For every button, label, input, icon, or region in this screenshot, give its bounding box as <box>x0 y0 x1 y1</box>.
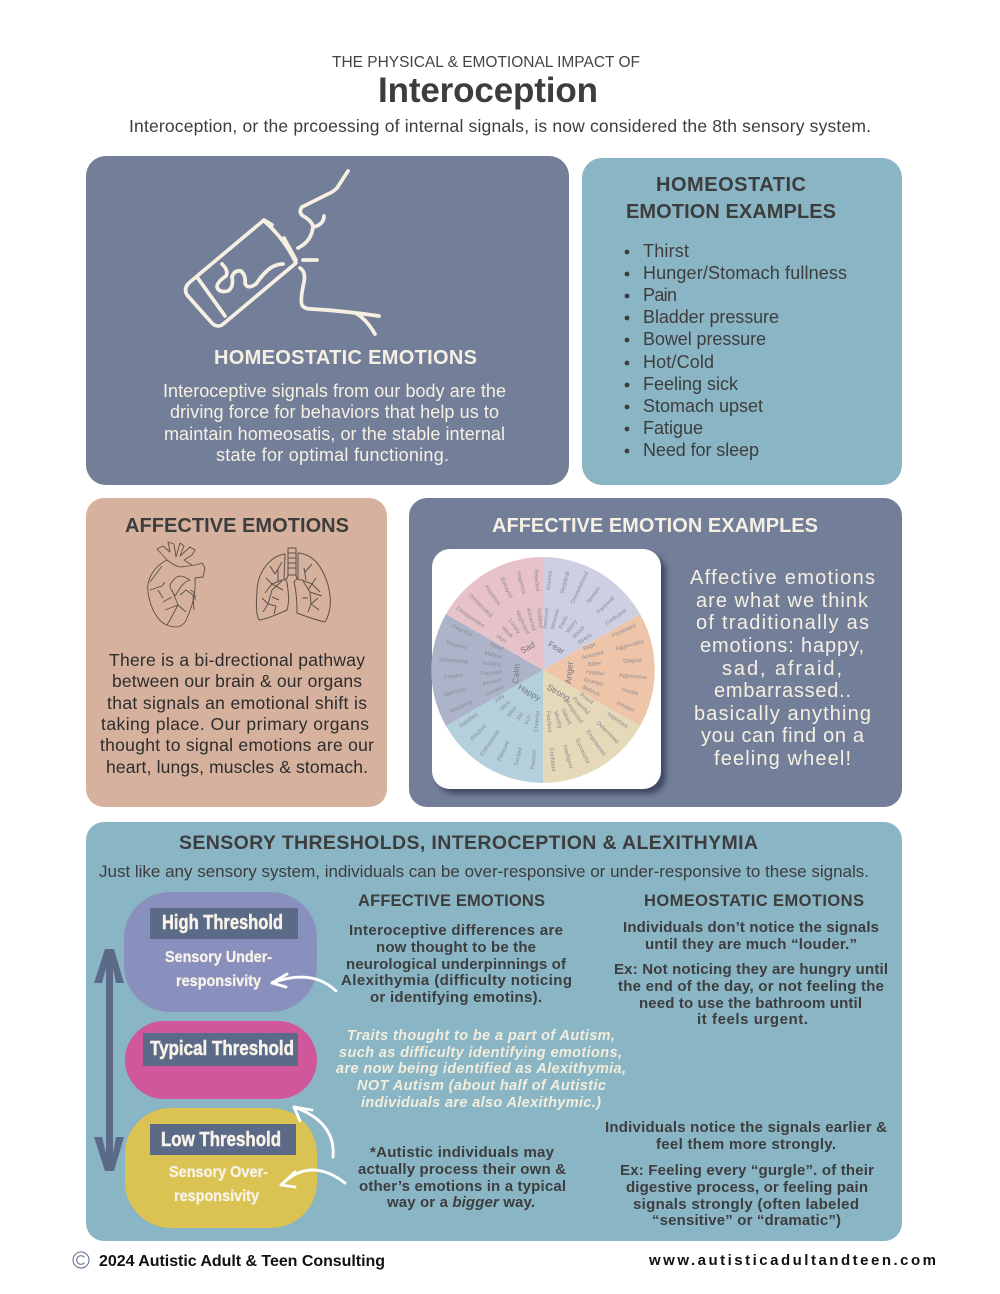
text: traits callout <box>336 1028 626 1111</box>
header <box>129 54 871 136</box>
feeling wheel: Proud <box>578 692 594 706</box>
feeling wheel: Excited <box>513 747 524 766</box>
text: high threshold homeostatic <box>614 919 888 1028</box>
feeling wheel: Respected <box>564 699 584 725</box>
text: low threshold homeostatic <box>605 1119 887 1229</box>
feeling wheel: Confused <box>605 608 628 627</box>
text: high threshold homeostatic: Ex: Not noticing they are hungry until <box>614 961 888 978</box>
bullet list: Hot/Cold <box>643 352 714 372</box>
panel: affective emotions <box>86 498 387 807</box>
feeling wheel: Isolated <box>536 608 543 628</box>
text: traits callout: individuals are also Alexithymic.) <box>361 1095 601 1111</box>
feeling wheel: Jealous <box>581 684 601 698</box>
text: low threshold homeostatic: “sensitive” or “dramatic”) <box>652 1212 841 1229</box>
text: autistic note: other’s emotions in a typical <box>359 1178 566 1195</box>
feeling wheel: Panic <box>558 615 570 630</box>
feeling wheel: Trusting <box>481 661 502 668</box>
feeling wheel: Nervous <box>550 608 561 630</box>
icon: copyright <box>73 1252 89 1268</box>
feeling wheel: Skeptical <box>559 571 571 595</box>
title: Interoception <box>378 71 598 110</box>
body text: between our brain & our organs <box>112 671 362 691</box>
body text: state for optimal functioning. <box>216 445 449 465</box>
feeling wheel: Optimistic <box>443 686 469 698</box>
bullet list: Stomach upset <box>643 396 763 416</box>
panel: affective emotion examples <box>409 498 902 807</box>
feeling wheel: Hostile <box>621 687 639 697</box>
text: traits callout: such as difficulty identifying emotions, <box>339 1045 622 1061</box>
panel: homeostatic emotions <box>86 156 569 485</box>
feeling wheel: Stress <box>577 632 593 646</box>
body text <box>690 567 875 770</box>
text: traits callout: are now being identified as Alexithymia, <box>336 1061 626 1077</box>
text: traits callout: Traits thought to be a part of Autism, <box>347 1028 615 1044</box>
body text: taking place. Our primary organs <box>101 714 369 734</box>
typical threshold block <box>125 1021 317 1099</box>
intro text: Just like any sensory system, individuals can be over-responsive or under-responsive to these signals. <box>99 862 869 881</box>
eyebrow title: THE PHYSICAL & EMOTIONAL IMPACT OF <box>332 54 640 71</box>
feeling wheel: Weak <box>500 625 514 640</box>
feeling wheel: Enthusiastic <box>479 729 502 757</box>
feeling wheel: Sad <box>518 639 537 656</box>
text: interoceptive differences: Interoceptive differences are <box>349 922 563 939</box>
bullet list: Bowel pressure <box>643 329 766 349</box>
icon: anatomical lungs <box>256 548 330 622</box>
feeling wheel: Glee <box>499 700 512 712</box>
feeling wheel: Annoyed <box>582 650 604 661</box>
feeling wheel: Relief <box>489 641 504 653</box>
feeling wheel: Empowered <box>584 729 606 757</box>
text: autistic note: actually process their own & <box>358 1161 566 1178</box>
icon: person drinking from a glass <box>186 171 379 334</box>
text: interoceptive differences: now thought to be the <box>376 939 536 956</box>
icon: anatomical heart <box>148 542 205 627</box>
arrow: alexithymia to under-responsivity <box>272 974 336 991</box>
text: high threshold homeostatic: Individuals don’t notice the signals <box>623 919 879 936</box>
feeling wheel: Cheerful <box>534 711 541 733</box>
body text: sad, afraid, <box>722 658 842 680</box>
high threshold block: High Threshold <box>162 912 283 934</box>
arrow: threshold scale <box>94 949 124 1171</box>
feeling wheel: Mellow <box>484 650 503 661</box>
heading: SENSORY THRESHOLDS, INTEROCEPTION & ALEXITHYMIA <box>179 832 758 854</box>
body text: maintain homeosatis, or the stable internal <box>164 424 505 444</box>
feeling wheel: Bliss <box>507 705 518 719</box>
feeling wheel: Important <box>606 712 629 730</box>
feeling wheel: Frustrated <box>611 623 637 639</box>
feeling wheel: Passion <box>530 749 538 770</box>
feeling wheel: Intelligent <box>561 744 573 769</box>
feeling wheel: Aggressive <box>619 673 647 681</box>
feeling wheel: Anxious <box>546 570 554 590</box>
bullet list: Need for sleep <box>643 440 759 460</box>
high threshold block: Sensory Under- <box>165 949 272 966</box>
feeling wheel: Insecure <box>543 607 550 629</box>
feeling wheel: Satisfied <box>458 712 479 729</box>
feeling wheel: Worthy <box>552 711 563 729</box>
heading: EMOTION EXAMPLES <box>626 201 836 223</box>
body text: are what we think <box>696 590 869 612</box>
feeling wheel: Jolly <box>494 693 506 705</box>
body text: Affective emotions <box>690 567 875 589</box>
feeling wheel: Anger <box>563 661 575 684</box>
website: www.autisticadultandteen.com <box>648 1252 936 1269</box>
feeling wheel: Joy <box>516 711 525 722</box>
body text: Interoceptive signals from our body are the <box>163 381 506 401</box>
feeling wheel: Unmotivated <box>467 592 493 619</box>
body text: thought to signal emotions are our <box>100 735 374 755</box>
feeling wheel: Determined <box>595 721 620 745</box>
body text: of traditionally as <box>696 612 869 634</box>
bullet list: Thirst <box>643 241 689 261</box>
feeling wheel: Hopeless <box>515 571 527 595</box>
body text: heart, lungs, muscles & stomach. <box>106 757 368 777</box>
feeling wheel: Lonely <box>507 618 521 635</box>
feeling wheel: Calm <box>510 663 522 684</box>
heading: HOMEOSTATIC EMOTIONS <box>214 347 477 369</box>
feeling wheel: Tension <box>586 586 602 605</box>
feeling wheel: Ashamed <box>525 607 536 632</box>
feeling wheel: Valued <box>560 708 572 726</box>
feeling wheel: Grumpy <box>583 677 604 688</box>
feeling wheel: Happy <box>516 682 543 703</box>
body text <box>163 381 506 465</box>
feeling wheel: Content <box>443 673 464 681</box>
text: high threshold homeostatic: it feels urgent. <box>697 1011 808 1028</box>
feeling wheel: Disappointed <box>455 606 485 629</box>
heading: HOMEOSTATIC <box>656 174 806 196</box>
text: high threshold homeostatic: need to use the bathroom until <box>639 995 862 1012</box>
panel: sensory thresholds <box>86 822 902 1241</box>
copyright text: 2024 Autistic Adult & Teen Consulting <box>99 1253 385 1270</box>
feeling wheel: Successful <box>574 738 590 765</box>
body text: embarrassed.. <box>714 680 851 702</box>
heading <box>626 174 836 223</box>
column heading: homeostatic emotions: HOMEOSTATIC EMOTIONS <box>644 892 864 910</box>
bullet list: Hunger/Stomach fullness <box>643 263 847 283</box>
feeling wheel: Strong <box>545 682 572 703</box>
feeling wheel: Paranoid <box>596 596 616 616</box>
body text: that signals an emotional shift is <box>107 693 367 713</box>
text: low threshold homeostatic: Individuals notice the signals earlier & <box>605 1119 887 1136</box>
feeling wheel: Shock <box>571 625 587 640</box>
text: autistic note: *Autistic individuals may <box>370 1144 555 1161</box>
text: interoceptive differences: or identifying emotins). <box>370 989 542 1006</box>
feeling wheel: Fearless <box>545 711 552 733</box>
feeling wheel: Neglected <box>514 610 530 635</box>
text: traits callout: NOT Autism (about half of Autistic <box>357 1078 606 1094</box>
body text: emotions: happy, <box>700 635 864 657</box>
feeling wheel: Amused <box>469 724 488 742</box>
feeling wheel: Rejected <box>532 569 540 592</box>
low threshold block: responsivity <box>174 1188 259 1205</box>
low threshold block: Low Threshold <box>161 1129 281 1151</box>
bullet list: Pain <box>643 285 677 305</box>
feeling wheel: Hopeless <box>483 584 501 607</box>
body text <box>100 650 374 777</box>
text: low threshold homeostatic: Ex: Feeling every “gurgle”. of their <box>620 1162 874 1179</box>
feeling wheel: Relaxed <box>446 640 467 651</box>
body text: driving force for behaviors that help us to <box>170 402 499 422</box>
low threshold block <box>125 1108 317 1228</box>
body text: There is a bi-drectional pathway <box>109 650 365 670</box>
high threshold block: responsivity <box>176 973 261 990</box>
high threshold block <box>124 892 317 1012</box>
feeling wheel: Aggrevated <box>615 639 644 652</box>
text: interoceptive differences <box>341 922 572 1006</box>
feeling wheel: Rage <box>582 642 597 653</box>
feeling wheel: Hateful <box>586 670 604 677</box>
heading: AFFECTIVE EMOTIONS <box>125 515 349 537</box>
bullet list: Fatigue <box>643 418 703 438</box>
feeling wheel <box>431 557 655 783</box>
text: interoceptive differences: Alexithymia (difficulty noticing <box>341 972 572 989</box>
bullet list: Feeling sick <box>643 374 739 394</box>
footer <box>73 1252 936 1270</box>
feeling wheel: Irritated <box>615 700 635 714</box>
feeling wheel: Pleasure <box>497 740 511 762</box>
feeling wheel: Overwhelmed <box>570 571 590 605</box>
feeling wheel: Accepting <box>449 699 473 715</box>
text: autistic note: way or a bigger way. <box>386 1194 535 1211</box>
feeling wheel: Worry <box>565 619 579 635</box>
body text: you can find on a <box>701 725 865 747</box>
feeling wheel: Confident <box>548 747 556 772</box>
text: low threshold homeostatic: digestive process, or feeling pain <box>626 1179 868 1196</box>
arrow: autistic note to over-responsivity <box>281 1170 345 1187</box>
feeling wheel: Comfort <box>485 684 506 698</box>
feeling wheel: Betrayed <box>498 577 513 599</box>
feeling wheel: Hurt <box>495 634 507 645</box>
subtitle: Interoception, or the prcoessing of internal signals, is now considered the 8th sensory system. <box>129 116 871 136</box>
body text: basically anything <box>694 703 871 725</box>
feeling wheel: Present <box>482 677 503 688</box>
bullet list <box>625 241 847 460</box>
text: interoceptive differences: neurological underpinnings of <box>346 956 567 973</box>
body text: feeling wheel! <box>714 748 851 770</box>
low threshold block: Sensory Over- <box>169 1164 268 1181</box>
feeling wheel: Bitter <box>588 661 602 668</box>
text: low threshold homeostatic: feel them more strongly. <box>656 1136 836 1153</box>
text: high threshold homeostatic: until they are much “louder.” <box>645 936 857 953</box>
feeling wheel: Focused <box>480 670 502 677</box>
feeling wheel: Disgust <box>623 657 643 665</box>
feeling wheel: Sentimental <box>438 657 468 665</box>
feeling wheel card <box>431 549 661 789</box>
heading: AFFECTIVE EMOTION EXAMPLES <box>492 515 818 537</box>
text: low threshold homeostatic: signals strongly (often labeled <box>633 1196 859 1213</box>
text: autistic note <box>358 1144 566 1211</box>
panel: homeostatic emotion examples <box>582 158 902 485</box>
text: high threshold homeostatic: the end of the day, or not feeling the <box>618 978 884 995</box>
arrow: over-responsivity to typical <box>294 1107 333 1157</box>
feeling wheel: Fun <box>524 715 533 725</box>
bullet list: Bladder pressure <box>643 307 779 327</box>
column heading: affective emotions: AFFECTIVE EMOTIONS <box>358 892 545 910</box>
feeling wheel: Powerful <box>571 696 590 716</box>
feeling wheel: Peaceful <box>451 624 473 638</box>
typical threshold block: Typical Threshold <box>150 1038 294 1060</box>
feeling wheel: Fear <box>546 639 567 656</box>
